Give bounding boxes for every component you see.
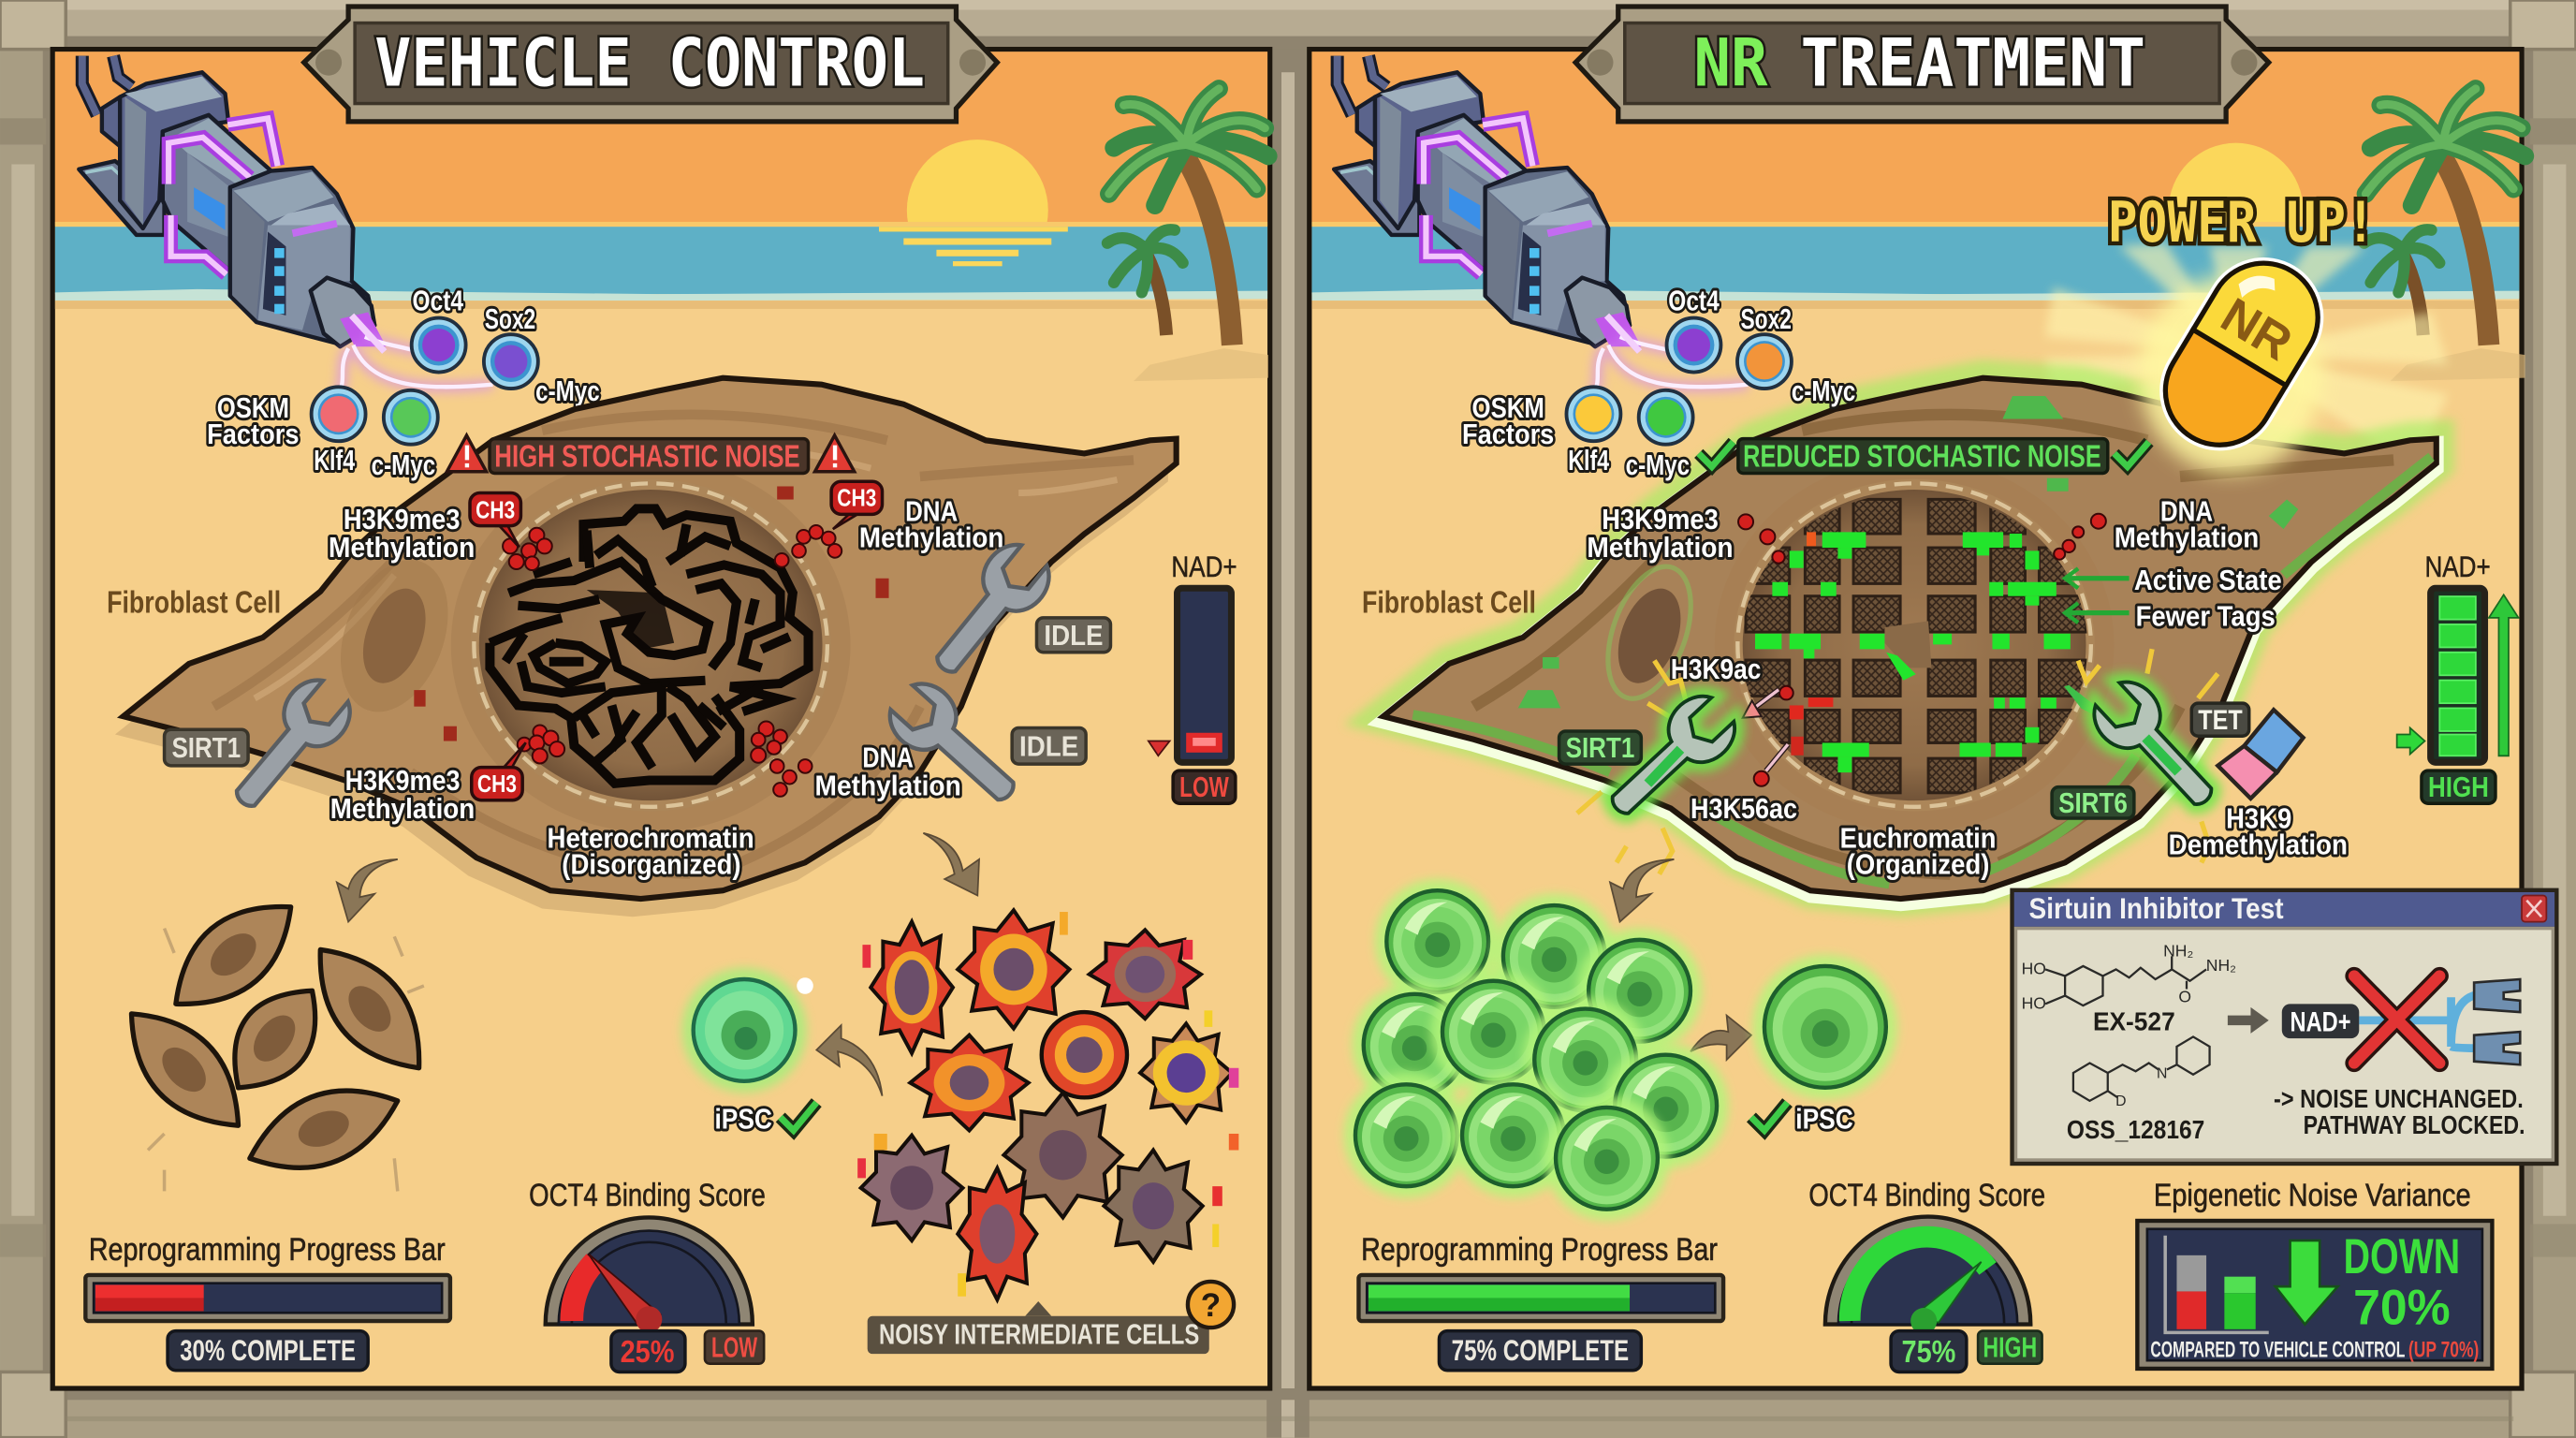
red methyl bead clusters <box>503 525 842 797</box>
down 70 text <box>2344 1229 2460 1336</box>
noisy cell 4 <box>1042 1012 1127 1097</box>
arrows to iPSC <box>1610 859 1751 1060</box>
labels on nucleus: Euchromatin <box>1840 822 1996 855</box>
OSKM factor spheres: OSKM <box>217 391 289 424</box>
OSKM factor spheres: Sox2 <box>485 302 535 335</box>
OCT4 gauge 75 <box>1808 1178 2045 1372</box>
reprogramming progress bar 75: Reprogramming Progress Bar <box>1361 1232 1718 1268</box>
OSKM delivery machine <box>79 56 493 394</box>
sparks <box>857 912 1238 1297</box>
NAD+ gauge low: LOW <box>1179 770 1229 803</box>
labels on nucleus: Fewer Tags <box>2136 600 2276 633</box>
result text line two: PATHWAY BLOCKED. <box>2304 1110 2525 1139</box>
enzyme tags: SIRT6 <box>2058 786 2128 819</box>
panel: vehicle control <box>52 7 1270 1388</box>
labels on nucleus: DNA <box>2160 494 2213 527</box>
labels on nucleus: (Organized) <box>1847 848 1989 881</box>
noisy cells label: ? <box>1201 1287 1221 1324</box>
stuck fibroblast cluster <box>131 907 424 1191</box>
OSKM factor spheres: Klf4 <box>1568 444 1609 477</box>
iPSC colony <box>1344 879 1728 1221</box>
DNA methylation lower label <box>815 741 961 801</box>
label OSS_128167: OSS_128167 <box>2067 1115 2204 1144</box>
methylation labels: (Disorganized) <box>562 848 741 881</box>
green state pointers <box>2065 568 2130 623</box>
demethylation label <box>2169 802 2348 861</box>
demethylation label: H3K9 <box>2226 802 2291 835</box>
noise variance bars <box>2165 1236 2269 1332</box>
iPSC cell rare: iPSC <box>714 1103 772 1136</box>
comparison caption: COMPARED TO VEHICLE CONTROL <box>2150 1339 2405 1363</box>
beach background <box>52 50 1270 1388</box>
fibroblast cell glowing <box>1383 378 2437 903</box>
CH3 tags: CH3 <box>476 496 515 524</box>
result text: -> NOISE UNCHANGED. <box>2274 1084 2524 1113</box>
OCT4 gauge 25: LOW <box>711 1331 757 1364</box>
OCT4 gauge 25: 25% <box>621 1335 674 1370</box>
palm trees <box>2364 89 2525 381</box>
OSKM delivery machine <box>1334 56 1748 394</box>
CH3 tags <box>470 481 883 800</box>
remaining methyl marks and removed acetyl marks <box>1738 514 2106 786</box>
single iPSC: iPSC <box>1795 1103 1853 1136</box>
blocked NAD pathway: NAD+ <box>2291 1006 2351 1037</box>
panel: NR treatment <box>1310 7 2556 1388</box>
labels on nucleus <box>1587 494 2282 881</box>
noise banner: HIGH STOCHASTIC NOISE <box>494 439 800 474</box>
noisy cell 10 <box>1104 1151 1203 1262</box>
OSKM factor spheres: c-Myc <box>535 374 600 407</box>
noisy cell 3 <box>1090 930 1201 1019</box>
enzyme tags <box>1559 703 2249 819</box>
power up text: POWER UP! <box>2108 191 2376 256</box>
OCT4 gauge 25 <box>529 1178 766 1372</box>
OSKM factor spheres <box>1462 285 1855 481</box>
noisy cell 8 <box>861 1136 963 1240</box>
molecule EX-527: NH₂ <box>2206 956 2236 975</box>
demethylation label: Demethylation <box>2169 829 2348 861</box>
label: fibroblast cell: Fibroblast Cell <box>1362 586 1536 621</box>
noisy cell 9 <box>958 1168 1036 1299</box>
active sirtuin wrenches <box>1577 649 2230 874</box>
noisy cells label: NOISY INTERMEDIATE CELLS <box>879 1318 1199 1351</box>
inhibition arrow <box>2228 1007 2269 1034</box>
molecule EX-527 <box>2022 941 2236 1013</box>
open chromatin green marks <box>1755 532 2097 772</box>
OCT4 gauge 25: OCT4 Binding Score <box>529 1178 766 1213</box>
NAD+ gauge low: NAD+ <box>1171 550 1237 583</box>
title plate: NR <box>1693 24 1768 101</box>
reprogramming progress bar 75: 75% COMPLETE <box>1452 1333 1629 1367</box>
up 70 caption: (UP 70%) <box>2408 1339 2479 1363</box>
OSKM factor spheres: c-Myc <box>372 448 435 481</box>
methylation labels: H3K9me3 <box>344 503 460 536</box>
label: fibroblast cell: Fibroblast Cell <box>107 586 281 621</box>
OSKM factor spheres: OSKM <box>1472 391 1544 424</box>
methylation labels <box>329 494 1003 881</box>
label EX-527: EX-527 <box>2093 1006 2175 1035</box>
reprogramming progress bar 30: Reprogramming Progress Bar <box>89 1232 446 1268</box>
down arrow <box>2276 1240 2337 1325</box>
molecule OSS_128167 <box>2073 1036 2210 1109</box>
enzyme tags: TET <box>2198 705 2243 736</box>
OSKM factor spheres: Oct4 <box>413 285 463 317</box>
labels on nucleus: Methylation <box>1587 531 1734 564</box>
labels on nucleus: H3K9ac <box>1671 653 1761 685</box>
OSKM factor spheres: Factors <box>207 418 299 450</box>
palm trees <box>1107 89 1268 381</box>
methylation labels: H3K9me3 <box>345 764 460 797</box>
OSKM factor spheres <box>207 285 600 481</box>
idle sirtuin wrenches <box>218 536 1059 823</box>
NAD+ gauge high: HIGH <box>2428 770 2489 803</box>
CH3 tags: CH3 <box>837 484 876 512</box>
noisy cell 2 <box>958 910 1070 1029</box>
noisy cell 7 <box>1003 1093 1122 1217</box>
noisy cell 1 <box>871 922 953 1053</box>
single iPSC <box>1751 955 1897 1136</box>
title plate <box>304 7 997 122</box>
noisy cell 5 <box>910 1035 1029 1130</box>
methylation labels: DNA <box>905 494 958 527</box>
title plate <box>1575 7 2269 122</box>
NAD+ gauge high: NAD+ <box>2424 550 2491 583</box>
noisy cells label <box>868 1282 1234 1354</box>
arrows from cell to outcomes <box>337 833 979 1096</box>
methylation labels: Heterochromatin <box>547 822 754 855</box>
OSKM factor spheres: c-Myc <box>1792 374 1855 407</box>
noise banner: REDUCED STOCHASTIC NOISE <box>1743 439 2101 474</box>
molecule OSS_128167: D <box>2115 1093 2127 1109</box>
fibroblast cell <box>115 378 1177 917</box>
methylation labels: Methylation <box>330 792 475 825</box>
title plate: VEHICLE CONTROL <box>374 24 925 101</box>
OSKM factor spheres: Oct4 <box>1668 285 1720 317</box>
sirtuin inhibitor test popup: Sirtuin Inhibitor Test <box>2029 891 2284 925</box>
DNA methylation lower label: DNA <box>862 741 914 774</box>
epigenetic noise variance panel <box>2137 1178 2492 1369</box>
OSKM factor spheres: Sox2 <box>1741 302 1792 335</box>
methylation labels: Methylation <box>859 521 1003 553</box>
reprogramming progress bar 30 <box>85 1232 450 1371</box>
noisy cell 6 <box>1140 1023 1232 1123</box>
nucleus: heterochromatin <box>451 458 851 832</box>
DNA methylation lower label: Methylation <box>815 769 961 801</box>
power-up rays <box>2045 243 2448 468</box>
labels on nucleus: Active State <box>2134 564 2282 596</box>
labels on nucleus: H3K9me3 <box>1602 503 1719 536</box>
enzyme tags: IDLE <box>1019 729 1078 762</box>
enzyme tags: IDLE <box>1044 619 1104 652</box>
molecule EX-527: HO <box>2022 994 2046 1013</box>
OCT4 gauge 75: 75% <box>1902 1335 1955 1370</box>
OCT4 gauge 75: OCT4 Binding Score <box>1808 1178 2045 1213</box>
title plate: TREATMENT <box>1801 24 2145 101</box>
NR capsule power-up <box>2139 243 2338 473</box>
sirtuin inhibitor test popup <box>2012 890 2556 1164</box>
epigenetic noise variance panel: Epigenetic Noise Variance <box>2154 1178 2471 1213</box>
reprogramming progress bar 30: 30% COMPLETE <box>180 1333 356 1367</box>
OSKM factor spheres: Factors <box>1462 418 1554 450</box>
down 70 text: DOWN <box>2344 1229 2460 1284</box>
enzyme tags: SIRT1 <box>1566 731 1634 764</box>
molecule OSS_128167: N <box>2157 1065 2167 1081</box>
beach background <box>1310 50 2522 1388</box>
OCT4 gauge 75: HIGH <box>1983 1331 2037 1364</box>
enzyme tags: SIRT1 <box>171 731 241 764</box>
labels on nucleus: H3K56ac <box>1690 792 1797 825</box>
OSKM factor spheres: c-Myc <box>1626 448 1690 481</box>
molecule EX-527: O <box>2178 988 2191 1006</box>
enzyme tags <box>165 618 1110 766</box>
blocked NAD pathway <box>2282 976 2520 1064</box>
nucleus: euchromatin grid <box>1735 481 2107 809</box>
molecule EX-527: HO <box>2022 960 2046 978</box>
down 70 text: 70% <box>2353 1281 2451 1336</box>
methylation labels: Methylation <box>329 531 475 564</box>
labels on nucleus: Methylation <box>2115 521 2259 553</box>
OSKM factor spheres: Klf4 <box>314 444 355 477</box>
NR capsule power-up: NR <box>2212 287 2301 372</box>
iPSC cell rare <box>681 968 816 1136</box>
NAD+ gauge low <box>1149 550 1237 803</box>
NAD+ gauge high <box>2397 550 2519 803</box>
molecule EX-527: NH₂ <box>2163 941 2193 960</box>
CH3 tags: CH3 <box>477 770 517 798</box>
TET eraser <box>2217 710 2304 799</box>
noisy intermediate cell cluster <box>857 910 1238 1299</box>
reprogramming progress bar 75 <box>1358 1232 1723 1371</box>
